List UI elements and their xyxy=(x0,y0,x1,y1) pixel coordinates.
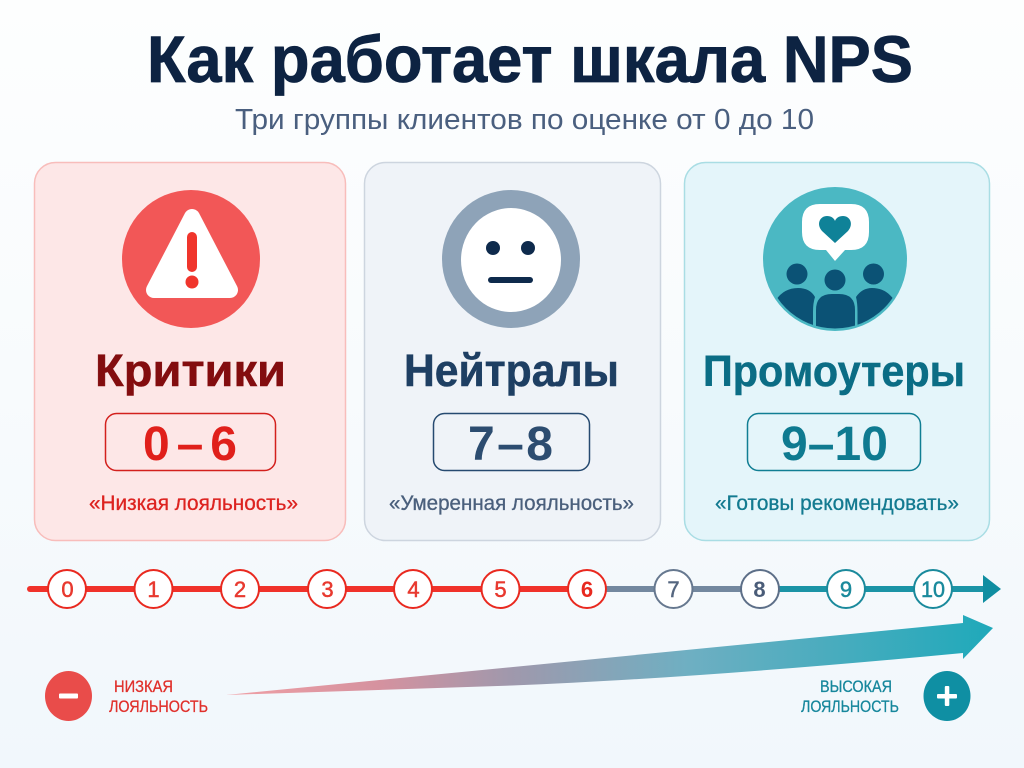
number scale 0 to 10: 8 xyxy=(753,577,766,602)
score range: 9-10 xyxy=(748,414,920,471)
icon: plus xyxy=(924,671,970,721)
label: high loyalty: ЛОЯЛЬНОСТЬ xyxy=(801,697,899,716)
score range: 7-8: 7–8 xyxy=(468,418,553,471)
icon: promoters group with heart xyxy=(763,187,907,335)
icon: neutral face xyxy=(442,190,580,328)
caption: promoters: «Готовы рекомендовать» xyxy=(715,492,959,515)
label: low loyalty xyxy=(109,677,208,716)
panel: critics xyxy=(34,162,346,540)
title: Как работает шкала NPS xyxy=(147,22,913,96)
label: high loyalty xyxy=(801,677,899,716)
subtitle: Три группы клиентов по оценке от 0 до 10 xyxy=(235,104,814,136)
label: low loyalty: ЛОЯЛЬНОСТЬ xyxy=(109,697,208,716)
score range: 0-6 xyxy=(106,414,276,471)
panel: promoters xyxy=(684,162,990,540)
number scale 0 to 10: 9 xyxy=(840,577,852,602)
number scale 0 to 10: 0 xyxy=(61,577,74,602)
score range: 0-6: 0–6 xyxy=(143,418,237,471)
number scale 0 to 10: 4 xyxy=(407,577,420,602)
heading: neutrals: Нейтралы xyxy=(404,345,619,396)
number scale 0 to 10: 7 xyxy=(667,577,680,602)
people xyxy=(778,264,892,328)
caption: critics: «Низкая лояльность» xyxy=(89,492,298,515)
panel: neutrals xyxy=(364,162,660,540)
heading: critics: Критики xyxy=(95,345,286,396)
number scale 0 to 10: 3 xyxy=(321,577,334,602)
speech bubble with heart xyxy=(802,204,869,261)
scale arrowhead xyxy=(983,575,1001,603)
score range: 9-10: 9–10 xyxy=(781,418,888,471)
label: low loyalty: НИЗКАЯ xyxy=(114,677,173,696)
loyalty growth arrow xyxy=(226,615,993,695)
label: high loyalty: ВЫСОКАЯ xyxy=(820,677,892,696)
caption: neutrals: «Умеренная лояльность» xyxy=(389,492,634,515)
number scale 0 to 10 xyxy=(30,570,1001,608)
number scale 0 to 10: 6 xyxy=(581,577,593,602)
icon: minus xyxy=(45,671,92,721)
score range: 7-8 xyxy=(434,414,590,471)
number scale 0 to 10: 2 xyxy=(234,577,246,602)
heading: promoters: Промоутеры xyxy=(703,347,965,396)
icon: warning xyxy=(122,190,260,328)
number scale 0 to 10: 1 xyxy=(147,577,160,602)
number scale 0 to 10: 10 xyxy=(921,577,945,602)
number scale 0 to 10: 5 xyxy=(494,577,507,602)
